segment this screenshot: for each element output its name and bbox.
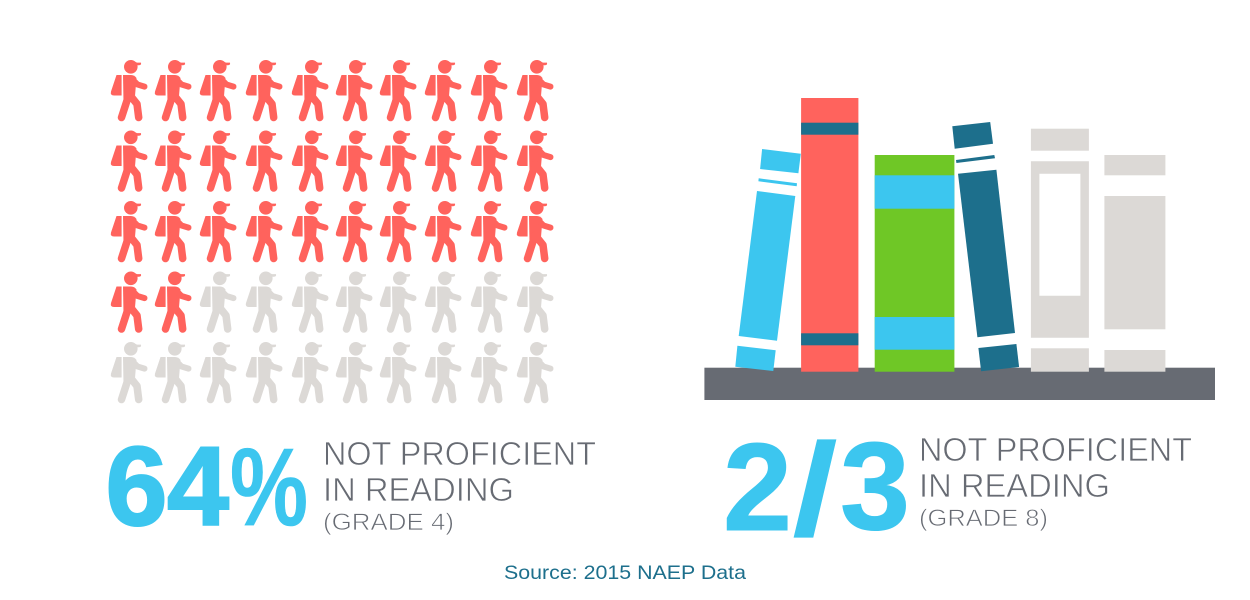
- big number 64%: 6: [106, 424, 168, 549]
- stat: two thirds grade 8: [723, 416, 1192, 563]
- shelf: [704, 368, 1215, 400]
- row 4 of students: [111, 272, 551, 329]
- big number 2/3: 2: [723, 419, 792, 557]
- stat: 64 percent grade 4: [106, 424, 596, 549]
- pictogram: 50 students, 32 highlighted: [111, 60, 551, 400]
- label: not proficient in reading grade 8: (GRADE 8): [919, 505, 1048, 532]
- big number 64%: [106, 424, 308, 549]
- label: not proficient in reading grade 8: IN READING: [919, 468, 1110, 505]
- illustration: bookshelf with six books: [704, 98, 1215, 400]
- label: not proficient in reading grade 4: NOT PROFICIENT: [323, 436, 596, 473]
- big number 2/3: 3: [840, 418, 910, 556]
- row 3 of students: [111, 201, 551, 258]
- label: not proficient in reading grade 8: NOT PROFICIENT: [919, 432, 1192, 469]
- book: tall coral: [801, 98, 858, 372]
- big number 64%: 4: [167, 424, 229, 549]
- label: not proficient in reading grade 8: [919, 432, 1192, 532]
- book: leaning teal: [952, 122, 1019, 371]
- big number 2/3: [723, 416, 910, 563]
- big number 64%: %: [230, 426, 308, 549]
- book: grey with window: [1031, 129, 1089, 372]
- big number 2/3: /: [792, 416, 838, 563]
- row 2 of students: [111, 130, 551, 188]
- row 5 of students: [111, 342, 551, 400]
- source line: Source: 2015 NAEP Data: [504, 562, 746, 584]
- label: not proficient in reading grade 4: [323, 436, 596, 536]
- book: wide green: [875, 155, 954, 372]
- label: not proficient in reading grade 4: (GRADE 4): [323, 509, 454, 536]
- book: leaning light blue: [735, 149, 801, 371]
- book: grey plain: [1104, 155, 1165, 372]
- row 1 of students: [111, 60, 551, 118]
- label: not proficient in reading grade 4: IN READING: [323, 472, 514, 509]
